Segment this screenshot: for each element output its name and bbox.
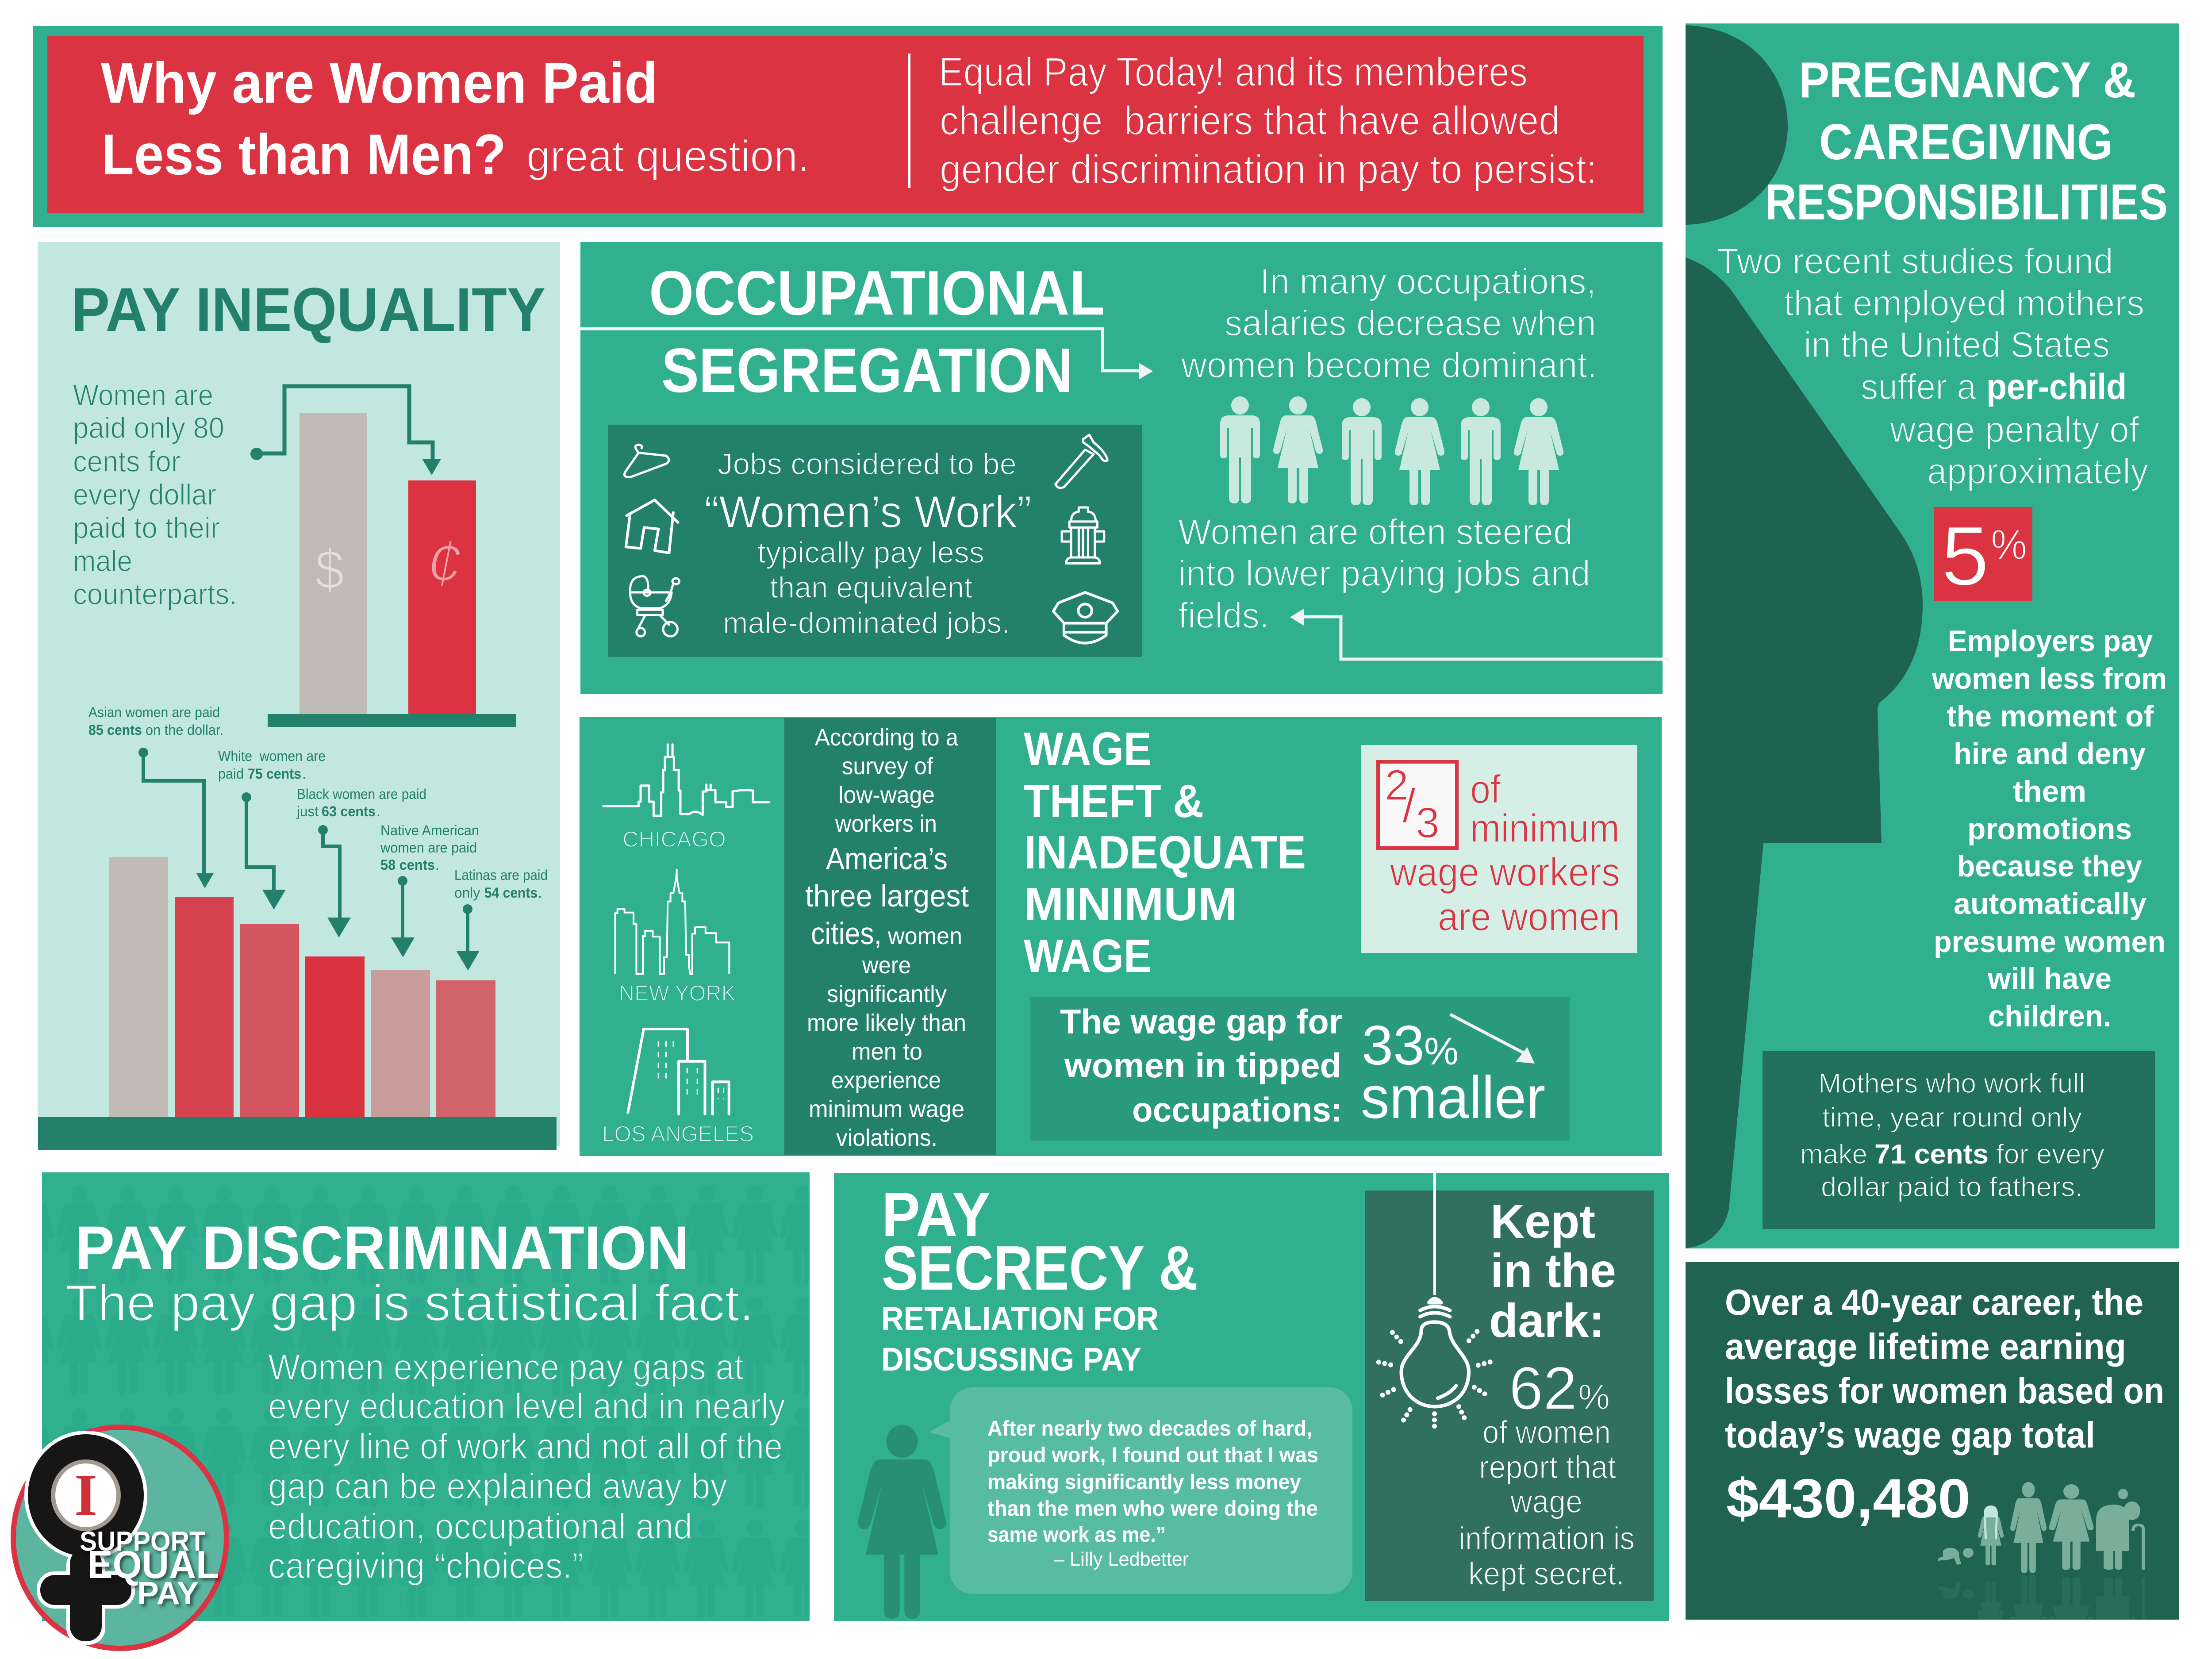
- icon: house: [626, 500, 678, 553]
- icon: los angeles buildings: [628, 1029, 729, 1114]
- label: native american women: Native American: [380, 822, 479, 838]
- heading: wage theft: THEFT &: [1024, 775, 1204, 827]
- headline: why are women paid less: Why are Women Paid: [101, 50, 658, 115]
- box: survey of three cities: low-wage: [838, 782, 935, 808]
- panel: wage theft and inadequate minimum wage: [580, 717, 1662, 1156]
- box: survey of three cities: were: [862, 952, 911, 979]
- text: women paid 80 cents: [73, 379, 237, 611]
- label: latinas: 54 cents: [484, 885, 538, 901]
- stat: two thirds fraction: 2: [1385, 761, 1409, 809]
- box: survey of three cities: [784, 718, 996, 1155]
- text: per-child wage penalty: that employed mothers: [1784, 283, 2144, 323]
- text: jobs considered women's work: “Women’s Work”: [704, 487, 1032, 537]
- label: white women: .: [302, 766, 306, 782]
- icon: chicago skyline: [603, 745, 769, 816]
- text: wage information secret: kept secret.: [1468, 1556, 1624, 1592]
- box: survey of three cities: minimum wage: [809, 1096, 964, 1122]
- stat: two thirds fraction: 3: [1416, 799, 1440, 847]
- callout: two thirds of minimum wage workers: [1361, 745, 1637, 953]
- bar chart: dollar vs cents: $: [315, 539, 344, 601]
- text: jobs considered women's work: typically pay less: [757, 536, 984, 569]
- text: employers pay women less: automatically: [1954, 887, 2147, 921]
- text: employers pay women less: promotions: [1967, 812, 2132, 846]
- heading: pay secrecy: SECRECY &: [882, 1233, 1198, 1303]
- label: latinas: only: [454, 885, 480, 901]
- callout: two thirds of minimum wage workers: are women: [1438, 895, 1620, 939]
- box: survey of three cities: violations.: [836, 1125, 937, 1151]
- stat: 5 percent: [1934, 507, 2032, 603]
- heading: pay discrimination: PAY DISCRIMINATION: [75, 1213, 689, 1283]
- text: wage information secret: [1459, 1415, 1635, 1592]
- header intro text: [939, 50, 1597, 192]
- panel: pay secrecy and retaliation: [834, 1173, 1669, 1621]
- icon: new york skyline: [615, 870, 729, 974]
- icon: fire hydrant: [1062, 507, 1104, 563]
- callout: mothers 71 cents: for every: [1996, 1139, 2104, 1170]
- box: survey of three cities: experience: [831, 1067, 941, 1094]
- label: asian women: on the dollar.: [146, 722, 223, 738]
- label: white women: 75 cents: [248, 766, 301, 782]
- heading: kept in the dark: in the: [1490, 1244, 1616, 1297]
- label: white women: paid: [218, 766, 244, 782]
- header intro text: gender discrimination in pay to persist:: [940, 147, 1597, 192]
- text: women paid 80 cents: Women are: [73, 379, 213, 412]
- text: women paid 80 cents: counterparts.: [73, 578, 237, 611]
- text: employers pay women less: presume women: [1934, 925, 2166, 959]
- box: survey of three cities: cities,: [811, 916, 882, 951]
- box: survey of three cities: America’s: [826, 841, 948, 876]
- text: per-child wage penalty: Two recent studies found: [1717, 241, 2113, 281]
- arrow: heading to salaries text: [580, 329, 1153, 380]
- icon: stroller: [630, 576, 679, 636]
- box: survey of three cities: workers in: [835, 810, 937, 837]
- text: women paid 80 cents: paid only 80: [73, 411, 224, 445]
- callout: mothers 71 cents: 71 cents: [1874, 1139, 1989, 1170]
- text: support equal pay: EQUAL: [88, 1543, 219, 1586]
- text: per-child wage penalty: [1717, 241, 2148, 492]
- text: 40-year career losses: [1725, 1282, 2164, 1455]
- callout: mothers 71 cents: make: [1800, 1139, 1867, 1170]
- icon: police hat: [1053, 592, 1118, 643]
- text: employers pay women less: women less from: [1932, 662, 2167, 695]
- heading: pay secrecy: RETALIATION FOR: [881, 1300, 1159, 1337]
- heading: wage theft: MINIMUM: [1024, 878, 1237, 930]
- stat: 430,480 dollars: $430,480: [1726, 1468, 1970, 1529]
- box: survey of three cities: women: [887, 923, 962, 949]
- text: women paid 80 cents: male: [73, 545, 132, 578]
- label: black women: 63 cents: [322, 803, 376, 819]
- box: survey of three cities: more likely than: [807, 1010, 966, 1036]
- arrow: into fields: [1290, 609, 1670, 659]
- arrow: black: [318, 825, 351, 937]
- speech bubble: lilly ledbetter quote: proud work, I found out that I was: [987, 1444, 1318, 1467]
- heading: wage theft: WAGE: [1024, 723, 1152, 775]
- label: los angeles: LOS ANGELES: [602, 1121, 754, 1146]
- header intro text: challenge barriers that have allowed: [940, 98, 1560, 143]
- label: latinas: Latinas are paid: [454, 867, 548, 883]
- callout: tipped occupations: [1030, 997, 1570, 1141]
- heading: pregnancy and caregiving: [1765, 52, 2168, 230]
- text: pay gaps explanation: education, occupational and: [268, 1506, 692, 1547]
- callout: tipped occupations: The wage gap for: [1060, 1002, 1342, 1041]
- speech bubble: lilly ledbetter quote: [929, 1387, 1352, 1594]
- text: wage information secret: wage: [1510, 1484, 1582, 1520]
- logo: i support equal pay: [13, 1427, 227, 1648]
- label: black women: [296, 786, 426, 819]
- text: women paid 80 cents: paid to their: [73, 511, 220, 545]
- text: pay gaps explanation: Women experience pay gaps at: [268, 1347, 744, 1387]
- text: per-child wage penalty: suffer a: [1861, 367, 1976, 407]
- text: jobs considered women's work: than equivalent: [770, 571, 972, 604]
- icon: woman speaking: [858, 1425, 946, 1619]
- text: 40-year career losses: Over a 40-year career, the: [1725, 1282, 2143, 1323]
- label: asian women: 85 cents: [88, 722, 142, 738]
- subheading: statistical fact: The pay gap is statistical fact.: [65, 1274, 754, 1332]
- heading: wage theft: INADEQUATE: [1024, 826, 1306, 879]
- speech bubble: lilly ledbetter quote: After nearly two decades of hard,: [987, 1417, 1312, 1440]
- panel: lifetime earning losses: [1686, 1262, 2179, 1659]
- text: pay gaps explanation: every education level and in nearly: [268, 1386, 785, 1426]
- label: asian women: [88, 704, 223, 738]
- text: women paid 80 cents: cents for: [73, 445, 180, 478]
- text: per-child wage penalty: approximately: [1927, 451, 2148, 492]
- icon: venus symbol: [24, 1431, 147, 1645]
- callout: tipped occupations: women in tipped: [1064, 1046, 1341, 1085]
- heading: pay secrecy: DISCUSSING PAY: [881, 1341, 1141, 1378]
- panel: occupational segregation: [580, 242, 1670, 694]
- bar chart: pay by race: [38, 857, 557, 1150]
- box: survey of three cities: three largest: [805, 879, 969, 913]
- label: native american women: women are paid: [380, 840, 477, 856]
- icon: venus symbol: I: [74, 1462, 97, 1528]
- heading: occupational segregation: OCCUPATIONAL: [649, 258, 1105, 328]
- bar chart: dollar vs cents: ¢: [426, 526, 463, 600]
- panel: pay inequality: [38, 242, 560, 1150]
- label: native american women: .: [435, 857, 439, 873]
- box: survey of three cities: According to a: [815, 724, 959, 751]
- heading: occupational segregation: [649, 258, 1105, 406]
- heading: kept in the dark: dark:: [1489, 1294, 1605, 1347]
- stat: two thirds fraction: [1378, 761, 1457, 848]
- callout: tipped occupations: %: [1424, 1030, 1459, 1073]
- label: latinas: [454, 867, 548, 901]
- speech bubble: lilly ledbetter quote: – Lilly Ledbetter: [1054, 1548, 1189, 1570]
- text: pay gaps explanation: caregiving “choices.”: [268, 1546, 584, 1586]
- header banner: [33, 26, 1663, 227]
- heading: pay secrecy: [881, 1179, 1198, 1378]
- text: employers pay women less: the moment of: [1947, 699, 2154, 733]
- text: employers pay women less: because they: [1957, 849, 2142, 883]
- text: employers pay women less: [1932, 624, 2167, 1033]
- headline: why are women paid less: Less than Men?: [101, 122, 506, 187]
- callout: mothers 71 cents: [1763, 1051, 2155, 1229]
- stat: 5 percent: 5: [1941, 509, 1989, 603]
- header intro text: Equal Pay Today! and its memberes: [939, 50, 1528, 95]
- box: women's work: [608, 425, 1142, 657]
- text: 40-year career losses: losses for women based on: [1725, 1370, 2164, 1411]
- stat: 62 percent: [1509, 1355, 1610, 1422]
- label: black women: .: [376, 803, 380, 819]
- text: employers pay women less: them: [2013, 775, 2086, 808]
- text: women are steered: fields.: [1178, 595, 1269, 636]
- stat: 5 percent: %: [1991, 521, 2027, 568]
- text: support equal pay: PAY: [137, 1576, 199, 1611]
- stat: 62 percent: 62: [1509, 1355, 1577, 1422]
- arrow: latinas: [456, 904, 480, 971]
- heading: wage theft: WAGE: [1024, 930, 1152, 982]
- label: black women: Black women are paid: [297, 786, 426, 802]
- callout: tipped occupations: smaller: [1361, 1064, 1545, 1131]
- headline: why are women paid less: great question.: [526, 131, 810, 181]
- text: salaries decrease: salaries decrease when: [1225, 303, 1596, 343]
- heading: kept in the dark: Kept: [1490, 1194, 1595, 1248]
- label: latinas: .: [538, 885, 542, 901]
- arrow: white: [242, 792, 286, 910]
- arrow: dollar to cents: [250, 386, 441, 475]
- box: kept in the dark: [1365, 1173, 1654, 1601]
- label: black women: just: [296, 803, 319, 819]
- callout: mothers 71 cents: Mothers who work full: [1818, 1068, 2085, 1099]
- heading: pay inequality: PAY INEQUALITY: [71, 275, 545, 344]
- heading: occupational segregation: SEGREGATION: [661, 335, 1073, 406]
- label: native american women: [380, 822, 479, 873]
- text: employers pay women less: Employers pay: [1948, 624, 2153, 658]
- text: women paid 80 cents: every dollar: [73, 478, 216, 511]
- label: chicago: CHICAGO: [622, 827, 726, 852]
- callout: two thirds of minimum wage workers: minimum: [1470, 806, 1620, 851]
- headline: why are women paid less: [101, 50, 810, 187]
- text: employers pay women less: will have: [1987, 962, 2112, 995]
- callout: two thirds of minimum wage workers: wage workers: [1390, 850, 1620, 895]
- icon: family generations: [1938, 1482, 2145, 1573]
- text: 40-year career losses: today’s wage gap total: [1725, 1414, 2095, 1455]
- text: support equal pay: SUPPORT: [80, 1526, 205, 1557]
- text: jobs considered women's work: male-dominated jobs.: [723, 606, 1010, 640]
- stat: 62 percent: %: [1578, 1377, 1610, 1417]
- text: wage information secret: information is: [1459, 1521, 1635, 1556]
- label: white women: White women are: [218, 748, 326, 764]
- arrow: shrinking gap: [1450, 1014, 1535, 1064]
- text: women are steered: Women are often steered: [1178, 512, 1573, 552]
- heading: pregnancy and caregiving: CAREGIVING: [1819, 114, 2113, 170]
- text: per-child wage penalty: wage penalty of: [1889, 410, 2139, 450]
- text: women are steered: into lower paying jobs and: [1178, 553, 1590, 594]
- callout: two thirds of minimum wage workers: of: [1470, 768, 1501, 812]
- text: support equal pay: [80, 1526, 219, 1611]
- box: survey of three cities: survey of: [842, 753, 933, 780]
- stat: two thirds fraction: /: [1402, 779, 1416, 832]
- text: salaries decrease: In many occupations,: [1260, 261, 1596, 302]
- text: wage information secret: report that: [1479, 1450, 1616, 1485]
- heading: kept in the dark: [1489, 1194, 1616, 1347]
- heading: pregnancy and caregiving: PREGNANCY &: [1799, 52, 2136, 108]
- callout: tipped occupations: 33: [1362, 1015, 1425, 1076]
- text: jobs considered women's work: Jobs considered to be: [718, 447, 1017, 481]
- icon: hanging light bulb: [1379, 1173, 1492, 1429]
- text: employers pay women less: children.: [1988, 999, 2111, 1033]
- box: survey of three cities: men to: [852, 1038, 922, 1065]
- text: jobs considered women's work: [704, 447, 1032, 640]
- text: pay gaps explanation: every line of work and not all of the: [268, 1426, 783, 1467]
- text: pay gaps explanation: gap can be explained away by: [268, 1466, 727, 1506]
- text: salaries decrease: women become dominant.: [1181, 345, 1597, 385]
- bar chart: dollar vs cents: [268, 413, 516, 727]
- callout: mothers 71 cents: dollar paid to fathers.: [1821, 1172, 2083, 1202]
- text: employers pay women less: hire and deny: [1954, 737, 2146, 771]
- text: wage information secret: of women: [1482, 1415, 1611, 1450]
- text: per-child wage penalty: in the United States: [1804, 325, 2110, 365]
- arrow: native american: [391, 876, 415, 957]
- text: per-child wage penalty: per-child: [1986, 367, 2127, 407]
- label: native american women: 58 cents: [380, 857, 435, 873]
- icon: pregnant silhouette: [1686, 25, 1923, 1248]
- panel: pregnancy and caregiving: [1686, 23, 2179, 1248]
- box: survey of three cities: significantly: [827, 981, 947, 1007]
- heading: wage theft: [1024, 723, 1306, 982]
- speech bubble: lilly ledbetter quote: same work as me.”: [987, 1523, 1166, 1547]
- callout: mothers 71 cents: time, year round only: [1822, 1102, 2082, 1133]
- speech bubble: lilly ledbetter quote: making significantly less money: [987, 1471, 1301, 1494]
- heading: pay secrecy: PAY: [882, 1179, 991, 1250]
- icon: row of men and women: [1220, 396, 1563, 505]
- text: salaries decrease: [1181, 261, 1597, 385]
- callout: tipped occupations: occupations:: [1132, 1090, 1342, 1129]
- text: 40-year career losses: average lifetime earning: [1725, 1326, 2126, 1367]
- icon: hammer: [1056, 435, 1107, 488]
- label: new york: NEW YORK: [619, 981, 736, 1006]
- speech bubble: lilly ledbetter quote: than the men who were doing the: [987, 1497, 1318, 1521]
- arrow: asian: [138, 748, 214, 888]
- icon: hanger: [624, 445, 669, 477]
- panel: pay discrimination: [42, 1172, 810, 1621]
- text: pay gaps explanation: [268, 1347, 785, 1586]
- label: white women: [218, 748, 326, 782]
- label: asian women: Asian women are paid: [88, 704, 220, 720]
- text: women are steered: [1178, 512, 1590, 636]
